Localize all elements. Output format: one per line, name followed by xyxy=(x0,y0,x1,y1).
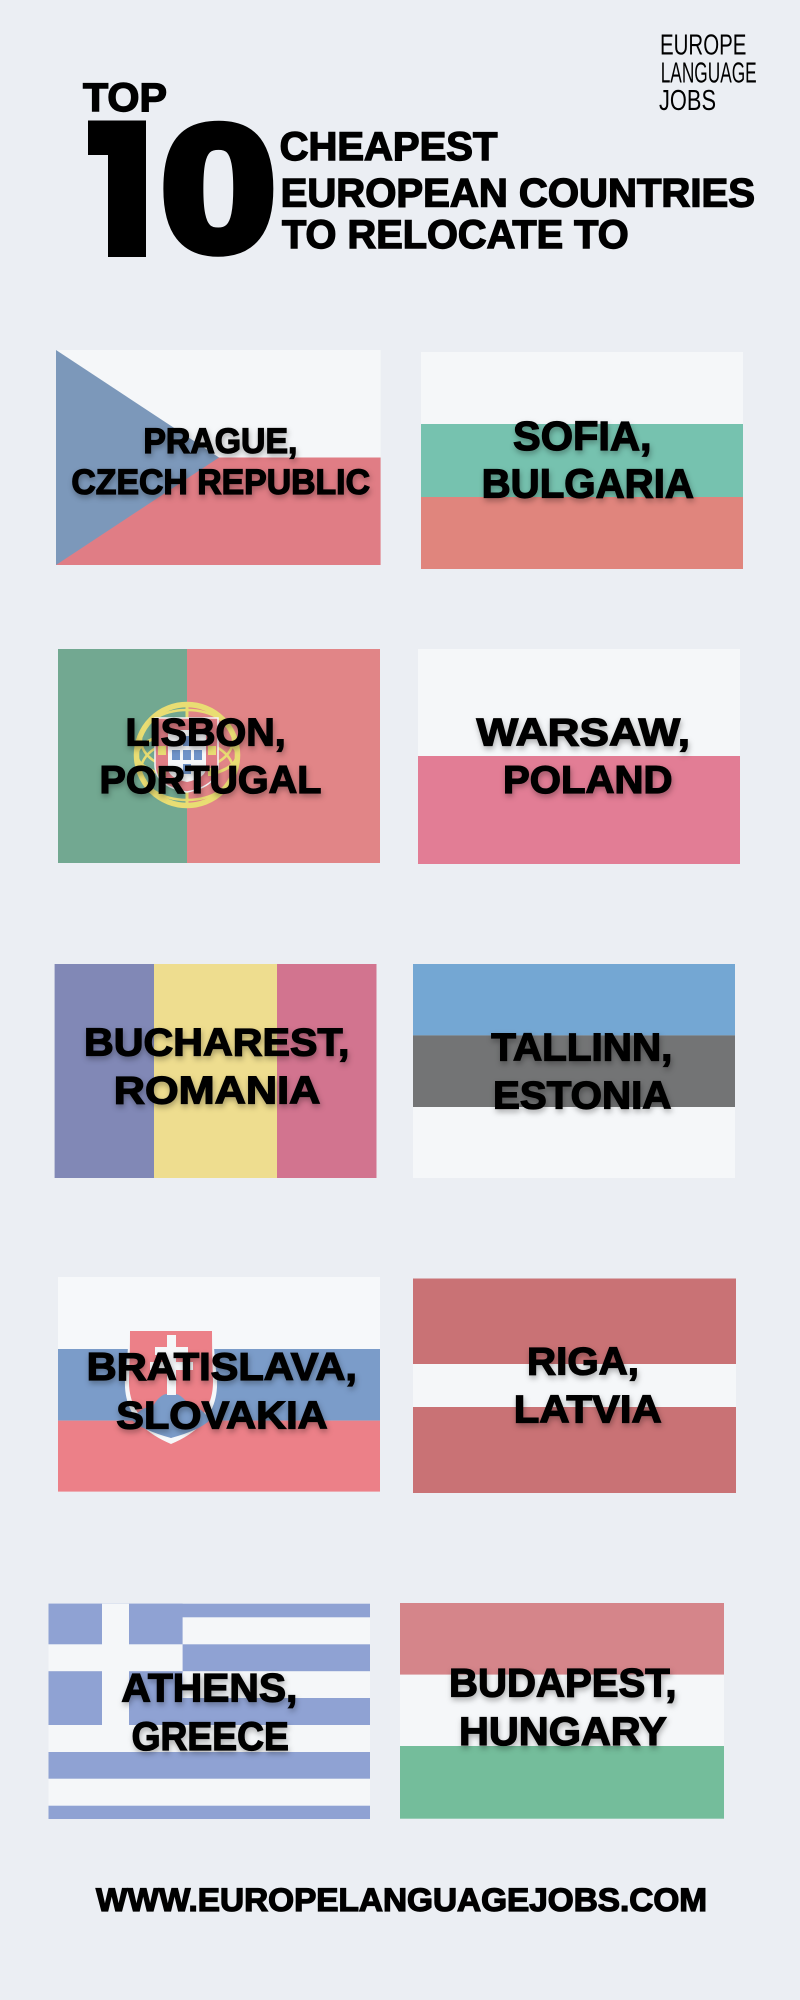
panel: Bucharest, Romania: ROMANIA xyxy=(114,1070,320,1112)
logo: Europe Language Jobs xyxy=(659,29,757,117)
panel: Budapest, Hungary xyxy=(400,1603,724,1819)
panel: Athens, Greece: ATHENS, xyxy=(121,1667,297,1711)
logo: Europe Language Jobs: EUROPE xyxy=(660,29,746,61)
panel: Bratislava, Slovakia: SLOVAKIA xyxy=(116,1394,328,1437)
icon: Slovak coat of arms xyxy=(125,1331,217,1444)
panel: Bucharest, Romania xyxy=(55,964,376,1178)
panel: Athens, Greece: GREECE xyxy=(132,1715,289,1759)
title: TO RELOCATE TO xyxy=(282,213,629,257)
title: EUROPEAN COUNTRIES xyxy=(281,171,755,215)
title: 1 xyxy=(86,86,152,298)
panel: Bratislava, Slovakia: BRATISLAVA, xyxy=(87,1346,357,1389)
panel: Lisbon, Portugal: PORTUGAL xyxy=(100,759,321,802)
title: 0 xyxy=(161,89,276,288)
panel: Warsaw, Poland xyxy=(418,649,740,864)
panel: Sofia, Bulgaria: SOFIA, xyxy=(513,413,652,459)
logo: Europe Language Jobs: JOBS xyxy=(659,85,716,117)
panel: Prague, Czech Republic: CZECH REPUBLIC xyxy=(71,463,370,502)
panel: Lisbon, Portugal: LISBON, xyxy=(126,712,286,755)
panel: Bratislava, Slovakia xyxy=(58,1277,380,1492)
panel: Budapest, Hungary: BUDAPEST, xyxy=(449,1662,676,1706)
footer website URL: WWW.EUROPELANGUAGEJOBS.COM xyxy=(96,1882,707,1918)
panel: Budapest, Hungary: HUNGARY xyxy=(459,1710,667,1754)
panel: Riga, Latvia: LATVIA xyxy=(514,1388,662,1431)
title: CHEAPEST xyxy=(280,125,497,169)
panel: Tallinn, Estonia xyxy=(413,964,735,1178)
title: TOP xyxy=(83,76,167,120)
panel: Sofia, Bulgaria: BULGARIA xyxy=(482,460,694,506)
panel: Tallinn, Estonia: TALLINN, xyxy=(491,1027,672,1070)
panel: Sofia, Bulgaria xyxy=(421,352,743,569)
panel: Lisbon, Portugal xyxy=(58,649,380,863)
panel: Prague, Czech Republic xyxy=(56,350,381,565)
icon: Portuguese coat of arms xyxy=(136,703,238,807)
title xyxy=(82,82,754,257)
panel: Warsaw, Poland: POLAND xyxy=(503,759,672,802)
panel: Riga, Latvia xyxy=(413,1278,736,1493)
panel: Riga, Latvia: RIGA, xyxy=(527,1341,639,1384)
panel: Athens, Greece xyxy=(48,1604,370,1819)
panel: Bucharest, Romania: BUCHAREST, xyxy=(84,1021,350,1064)
panel: Warsaw, Poland: WARSAW, xyxy=(476,712,690,755)
panel: Prague, Czech Republic: PRAGUE, xyxy=(143,422,297,461)
panel: Tallinn, Estonia: ESTONIA xyxy=(493,1075,671,1118)
